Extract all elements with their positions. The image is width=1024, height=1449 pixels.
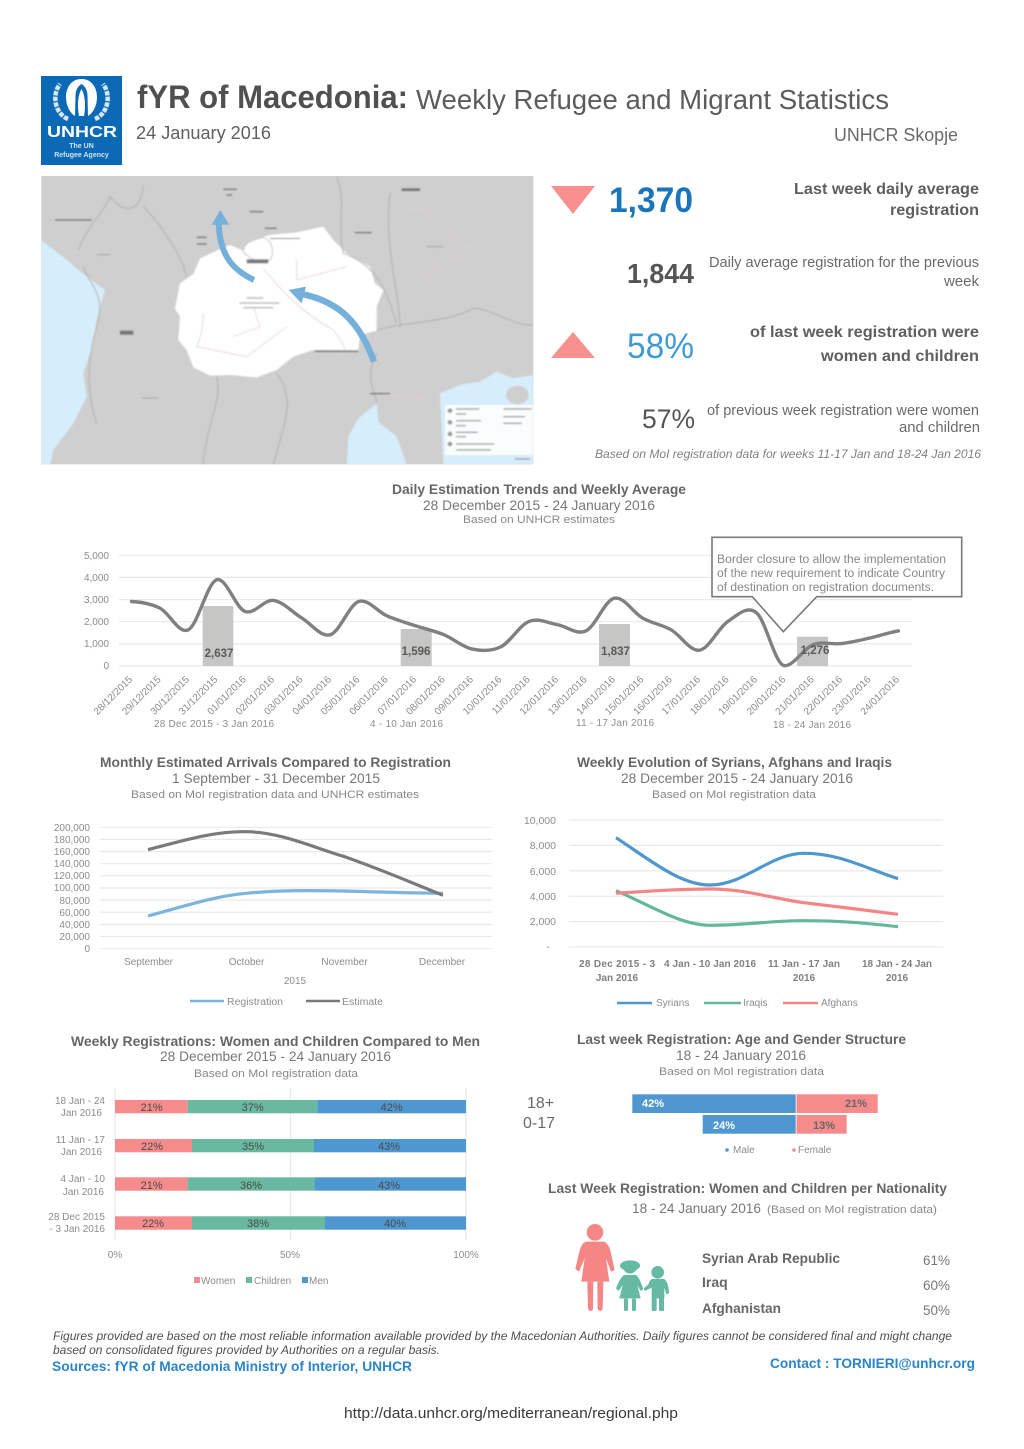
heading: weekly nationality chart: Based on MoI registration data — [652, 789, 817, 801]
date axis labels: 21/01/2016 — [774, 674, 817, 718]
Syrians line — [616, 838, 898, 885]
heading: monthly arrivals chart: 1 September - 31 December 2015 — [172, 770, 380, 786]
Iraqis line — [616, 891, 898, 927]
date axis labels: 14/01/2016 — [575, 674, 618, 718]
chart: weekly evolution by nationality: 6,000 — [530, 866, 556, 878]
date axis labels: 12/01/2016 — [518, 674, 561, 718]
chart: age and gender pyramid: 21% — [845, 1098, 867, 1110]
bar: 11-17 Jan — [115, 1139, 466, 1153]
arrow: route from Greece — [289, 287, 374, 362]
arrow: northward route — [212, 210, 254, 280]
chart: daily estimation trends — [84, 551, 912, 731]
nationality table: Iraq — [702, 1274, 728, 1290]
chart: daily estimation trends: 5,000 — [84, 551, 109, 562]
chart: stacked registrations by group: 18 Jan - 24 — [55, 1096, 105, 1107]
date axis labels: 30/12/2015 — [149, 674, 192, 718]
chart: weekly evolution by nationality: 4 Jan - 10 Jan 2016 — [664, 959, 756, 970]
legend: Registration — [227, 997, 283, 1008]
date axis labels: 07/01/2016 — [376, 674, 419, 718]
bar: 28 Dec-3 Jan: 40% — [384, 1218, 406, 1230]
bar: 18-24 Jan: 37% — [242, 1102, 264, 1114]
Afghans line — [616, 889, 898, 914]
date axis labels: 01/01/2016 — [206, 674, 249, 718]
chart: monthly arrivals vs registration: 2015 — [284, 976, 307, 987]
icon: UNHCR logo: Refugee Agency — [54, 152, 109, 159]
chart: daily estimation trends: 1,000 — [84, 639, 109, 650]
estimate line — [148, 832, 443, 895]
women and children share value: 58% — [627, 327, 694, 366]
date axis labels: 19/01/2016 — [717, 674, 760, 718]
date axis labels: 09/01/2016 — [433, 674, 476, 718]
chart: age and gender pyramid — [523, 1094, 878, 1156]
chart: monthly arrivals vs registration: 180,000 — [54, 835, 90, 846]
week range labels: 18 - 24 Jan 2016 — [773, 720, 851, 731]
last week average value: 1,370 — [609, 181, 693, 220]
chart: monthly arrivals vs registration: 140,000 — [54, 859, 90, 870]
legend: Afghans — [821, 998, 858, 1009]
bar: 4-10 Jan — [115, 1177, 466, 1192]
chart: stacked registrations by group: Jan 2016 — [61, 1108, 102, 1119]
bar: 4-10 Jan: 21% — [141, 1180, 163, 1192]
chart: weekly evolution by nationality: 11 Jan - 17 Jan — [768, 959, 840, 970]
weekly average values: 1,276 — [801, 645, 829, 657]
bar: 11-17 Jan: 35% — [242, 1141, 264, 1153]
heading: women and children per nationality: Last Week Registration: Women and Children per Nationality — [548, 1181, 948, 1196]
legend: Female — [798, 1145, 832, 1156]
chart: monthly arrivals vs registration: 200,000 — [54, 823, 90, 834]
chart: monthly arrivals vs registration — [54, 823, 492, 1008]
chart: stacked registrations by group: Jan 2016 — [63, 1187, 104, 1198]
bar: 28 Dec-3 Jan — [115, 1216, 466, 1230]
chart: weekly evolution by nationality: 2,000 — [530, 916, 556, 928]
date axis labels: 05/01/2016 — [319, 674, 363, 718]
chart: age and gender pyramid: 24% — [713, 1120, 735, 1132]
previous week average label — [709, 254, 979, 290]
date axis labels: 29/12/2015 — [120, 674, 164, 718]
chart: monthly arrivals vs registration: 20,000 — [59, 932, 90, 943]
last week average label: registration — [890, 202, 979, 219]
heading: weekly nationality chart — [577, 755, 892, 801]
date axis labels: 18/01/2016 — [688, 674, 732, 718]
icon: woman and children — [575, 1224, 669, 1311]
icon: arrow up — [551, 332, 595, 358]
date axis labels: 23/01/2016 — [830, 674, 874, 718]
heading: age and gender chart: 18 - 24 January 2016 — [676, 1047, 806, 1063]
heading: daily estimation chart: 28 December 2015 - 24 January 2016 — [423, 497, 655, 513]
previous women and children share label — [707, 402, 980, 436]
chart: weekly evolution by nationality — [524, 815, 943, 1009]
date axis labels: 02/01/2016 — [234, 674, 277, 718]
date axis labels: 08/01/2016 — [404, 674, 448, 718]
date axis labels: 31/12/2015 — [177, 674, 221, 718]
legend: Children — [254, 1276, 291, 1287]
daily estimate line — [132, 580, 898, 666]
footer disclaimer: Figures provided are based on the most reliable information available provided by the Macedonian Authorities. Daily figures cannot be considered final and might change — [53, 1331, 952, 1343]
chart: age and gender pyramid: 13% — [813, 1120, 835, 1132]
women and children share label — [750, 324, 979, 365]
previous women and children share value: 57% — [642, 404, 695, 434]
chart: stacked registrations by group: - 3 Jan 2016 — [49, 1224, 105, 1235]
source url: http://data.unhcr.org/mediterranean/regional.php — [344, 1405, 678, 1422]
contact: Contact : TORNIERI@unhcr.org — [770, 1355, 975, 1371]
bar: 11-17 Jan: 43% — [378, 1141, 400, 1153]
legend — [617, 998, 858, 1009]
callout: border closure: of destination on registration documents. — [717, 582, 934, 594]
women and children share label: women and children — [820, 348, 979, 365]
bar: 4-10 Jan: 36% — [240, 1180, 262, 1192]
office name: UNHCR Skopje — [834, 125, 958, 145]
chart: monthly arrivals vs registration: September — [124, 957, 174, 968]
callout: border closure — [712, 537, 962, 632]
date axis labels: 16/01/2016 — [632, 674, 675, 718]
weekly average values: 2,637 — [205, 648, 233, 660]
chart: monthly arrivals vs registration: 80,000 — [59, 896, 90, 907]
chart: monthly arrivals vs registration: October — [229, 957, 265, 968]
nationality table — [702, 1250, 950, 1318]
chart: stacked registrations by group: 100% — [453, 1250, 479, 1261]
map of fYR Macedonia and migration routes — [41, 176, 533, 464]
week range labels: 11 - 17 Jan 2016 — [576, 718, 654, 729]
chart: weekly evolution by nationality: 28 Dec 2015 - 3 — [579, 959, 655, 970]
chart: daily estimation trends: 4,000 — [84, 573, 109, 584]
bar: 28 Dec-3 Jan: 38% — [247, 1218, 269, 1230]
date axis labels — [92, 674, 902, 718]
icon: UNHCR logo: The UN — [69, 143, 94, 150]
heading: women and children per nationality: (Based on MoI registration data) — [767, 1204, 937, 1216]
data note: Based on MoI registration data for weeks 11-17 Jan and 18-24 Jan 2016 — [595, 449, 982, 461]
icon: UNHCR logo: UNHCR — [47, 124, 117, 141]
nationality table: 50% — [923, 1302, 950, 1318]
heading: daily estimation chart: Daily Estimation Trends and Weekly Average — [392, 482, 686, 497]
previous week average label: Daily average registration for the previous — [709, 254, 979, 271]
nationality table: 61% — [923, 1252, 950, 1268]
women and children share label: of last week registration were — [750, 324, 979, 341]
footer disclaimer — [53, 1331, 952, 1357]
chart: weekly evolution by nationality: 8,000 — [530, 840, 556, 852]
legend: Men — [309, 1276, 328, 1287]
weekly average values: 1,837 — [601, 646, 630, 658]
date axis labels: 24/01/2016 — [859, 674, 902, 718]
legend: Iraqis — [743, 998, 767, 1009]
chart: daily estimation trends: 3,000 — [84, 595, 109, 606]
heading: age and gender chart: Based on MoI registration data — [659, 1066, 825, 1078]
chart: monthly arrivals vs registration: 100,000 — [54, 883, 90, 894]
heading: weekly nationality chart: 28 December 2015 - 24 January 2016 — [621, 770, 853, 786]
legend: Syrians — [656, 998, 689, 1009]
legend — [194, 1276, 328, 1287]
chart: monthly arrivals vs registration: 120,000 — [54, 871, 90, 882]
chart: weekly evolution by nationality: 10,000 — [524, 815, 556, 827]
legend: Male — [733, 1145, 755, 1156]
chart: age and gender pyramid: 42% — [642, 1098, 664, 1110]
legend: Women — [201, 1276, 235, 1287]
week range labels — [154, 718, 851, 731]
heading: monthly arrivals chart: Monthly Estimated Arrivals Compared to Registration — [100, 755, 451, 770]
bar: 18-24 Jan: 42% — [381, 1102, 403, 1114]
chart: weekly evolution by nationality: 2016 — [793, 973, 816, 984]
date axis labels: 06/01/2016 — [348, 674, 391, 718]
chart: monthly arrivals vs registration: December — [419, 957, 466, 968]
chart: monthly arrivals vs registration: 40,000 — [59, 920, 90, 931]
chart: stacked registrations by group: 28 Dec 2015 — [48, 1212, 105, 1223]
date axis labels: 11/01/2016 — [490, 674, 533, 717]
chart: monthly arrivals vs registration: 0 — [84, 944, 90, 955]
date axis labels: 20/01/2016 — [745, 674, 789, 718]
previous women and children share label: and children — [899, 419, 980, 436]
chart: stacked registrations by group — [48, 1088, 479, 1287]
chart: weekly evolution by nationality: 2016 — [886, 973, 909, 984]
previous week average value: 1,844 — [627, 258, 694, 289]
chart: stacked registrations by group: Jan 2016 — [61, 1147, 102, 1158]
previous women and children share label: of previous week registration were women — [707, 402, 979, 419]
heading: women and children vs men chart: Weekly Registrations: Women and Children Compared to Men — [71, 1034, 480, 1049]
bar: 11-17 Jan: 22% — [141, 1141, 163, 1153]
week range labels: 28 Dec 2015 - 3 Jan 2016 — [154, 719, 274, 730]
legend — [190, 997, 383, 1008]
chart: daily estimation trends: 0 — [103, 661, 109, 672]
heading: monthly arrivals chart: Based on MoI registration data and UNHCR estimates — [131, 789, 420, 801]
previous week average label: week — [943, 273, 979, 290]
date axis labels: 13/01/2016 — [546, 674, 590, 718]
heading: age and gender chart: Last week Registration: Age and Gender Structure — [577, 1032, 906, 1047]
chart: weekly evolution by nationality: Jan 2016 — [596, 973, 639, 984]
chart: stacked registrations by group: 50% — [280, 1250, 300, 1261]
weekly average values — [205, 645, 829, 660]
title: Weekly Refugee and Migrant Statistics — [416, 84, 889, 115]
footer disclaimer: based on consolidated figures provided by Authorities on a regular basis. — [53, 1345, 440, 1357]
last week average label — [794, 181, 979, 219]
chart: monthly arrivals vs registration: 60,000 — [59, 908, 90, 919]
bar: 18-24 Jan: 21% — [141, 1102, 163, 1114]
date axis labels: 17/01/2016 — [660, 674, 703, 718]
chart: age and gender pyramid: 18+ — [527, 1095, 554, 1112]
bar: 4-10 Jan: 43% — [378, 1180, 400, 1192]
date axis labels: 15/01/2016 — [603, 674, 647, 718]
legend — [725, 1145, 832, 1156]
weekly average bars — [203, 606, 828, 666]
chart: daily estimation trends: 2,000 — [84, 617, 109, 628]
title — [137, 79, 889, 115]
nationality table: Syrian Arab Republic — [702, 1250, 840, 1266]
callout: border closure: Border closure to allow the implementation — [717, 554, 946, 566]
heading: age and gender chart — [577, 1032, 906, 1078]
chart: monthly arrivals vs registration: November — [321, 957, 368, 968]
nationality table: 60% — [923, 1277, 950, 1293]
chart: weekly evolution by nationality: 4,000 — [530, 891, 556, 903]
heading: women and children vs men chart: Based on MoI registration data — [194, 1068, 359, 1080]
date: 24 January 2016 — [136, 123, 271, 143]
heading: women and children vs men chart — [71, 1034, 480, 1080]
date axis labels: 04/01/2016 — [291, 674, 334, 718]
legend: Estimate — [342, 997, 383, 1008]
date axis labels: 10/01/2016 — [461, 674, 505, 718]
date axis labels: 22/01/2016 — [802, 674, 845, 718]
chart: weekly evolution by nationality: - — [546, 941, 550, 953]
weekly average values: 1,596 — [402, 646, 430, 658]
callout: border closure: of the new requirement to indicate Country — [717, 568, 945, 580]
bar: 28 Dec-3 Jan: 22% — [142, 1218, 164, 1230]
heading: women and children vs men chart: 28 December 2015 - 24 January 2016 — [160, 1048, 391, 1064]
title: fYR of Macedonia: — [137, 79, 408, 115]
chart: stacked registrations by group: 4 Jan - 10 — [61, 1174, 105, 1185]
week range labels: 4 - 10 Jan 2016 — [370, 719, 443, 730]
nationality table: Afghanistan — [702, 1300, 781, 1316]
chart: stacked registrations by group: 0% — [108, 1250, 122, 1261]
heading: daily estimation chart — [392, 482, 686, 526]
chart: stacked registrations by group: 11 Jan - 17 — [56, 1135, 105, 1146]
chart: age and gender pyramid: 0-17 — [523, 1115, 555, 1132]
date axis labels: 28/12/2015 — [92, 674, 135, 718]
heading: daily estimation chart: Based on UNHCR estimates — [463, 514, 616, 526]
icon: arrow down — [551, 186, 595, 214]
last week average label: Last week daily average — [794, 181, 979, 198]
heading: weekly nationality chart: Weekly Evolution of Syrians, Afghans and Iraqis — [577, 755, 892, 770]
date axis labels: 03/01/2016 — [262, 674, 306, 718]
chart: weekly evolution by nationality: 18 Jan - 24 Jan — [862, 959, 932, 970]
chart: monthly arrivals vs registration: 160,000 — [54, 847, 90, 858]
sources: Sources: fYR of Macedonia Ministry of Interior, UNHCR — [52, 1358, 412, 1374]
registration line — [148, 891, 443, 916]
heading: monthly arrivals chart — [100, 755, 451, 801]
bar: 18-24 Jan — [115, 1100, 466, 1114]
heading: women and children per nationality — [548, 1181, 948, 1216]
icon: UNHCR logo — [41, 76, 122, 165]
heading: women and children per nationality: 18 - 24 January 2016 — [632, 1200, 761, 1216]
